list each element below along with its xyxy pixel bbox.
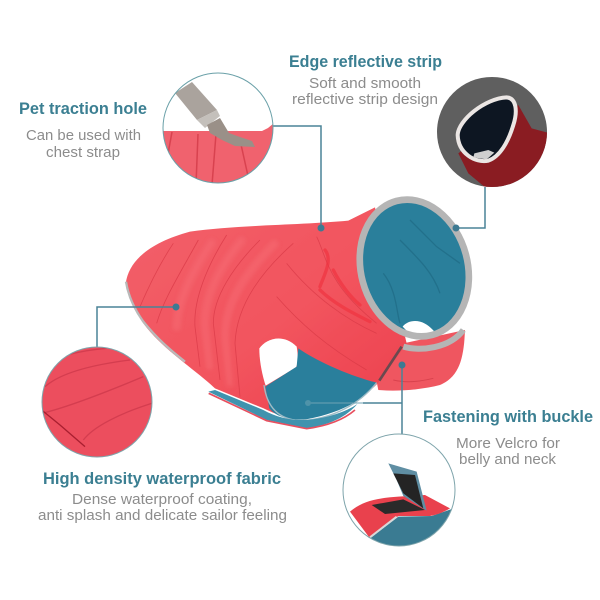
collar lining: [345, 187, 484, 349]
belly panel lining: [265, 348, 377, 420]
heading: edge reflective strip: Edge reflective strip: [289, 53, 442, 71]
text: fabric description: anti splash and delicate sailor feeling: [38, 508, 287, 524]
shoulder wrinkles: [320, 250, 370, 322]
leg opening: [259, 339, 298, 386]
text: reflective strip description: [292, 76, 438, 108]
text: reflective strip description: Soft and smooth: [309, 76, 421, 92]
connector lines: [97, 126, 485, 434]
detail circle: buckle: [342, 434, 456, 546]
text: fabric description: Dense waterproof coating,: [72, 492, 252, 508]
detail circle: reflective strip: [437, 77, 550, 190]
text: fastening description: [456, 436, 560, 468]
text: traction description: chest strap: [46, 145, 120, 161]
text: traction description: Can be used with: [26, 128, 141, 144]
text: reflective strip description: reflective strip design: [292, 92, 438, 108]
heading: high density waterproof fabric: High density waterproof fabric: [43, 470, 281, 488]
text: fabric description: [38, 492, 287, 524]
heading: fastening with buckle: Fastening with buckle: [423, 408, 593, 426]
hem reflective edge: [126, 282, 185, 362]
text: fastening description: More Velcro for: [456, 436, 560, 452]
detail circle: traction hole: [162, 72, 274, 184]
jacket back flap: [377, 330, 465, 391]
jacket body: [126, 207, 407, 418]
collar opening white gap: [403, 321, 437, 334]
collar strap edge: [403, 330, 463, 349]
collar reflective ring: [345, 187, 484, 349]
quilted shading: [140, 235, 377, 397]
text: traction description: [26, 128, 141, 161]
lining folds: [383, 220, 460, 323]
belly strap: [208, 390, 357, 428]
heading: pet traction hole: Pet traction hole: [19, 100, 147, 118]
text: fastening description: belly and neck: [459, 452, 557, 468]
jacket illustration: [126, 187, 484, 429]
connector dots: [172, 224, 460, 406]
detail circle: waterproof fabric: [40, 345, 155, 460]
